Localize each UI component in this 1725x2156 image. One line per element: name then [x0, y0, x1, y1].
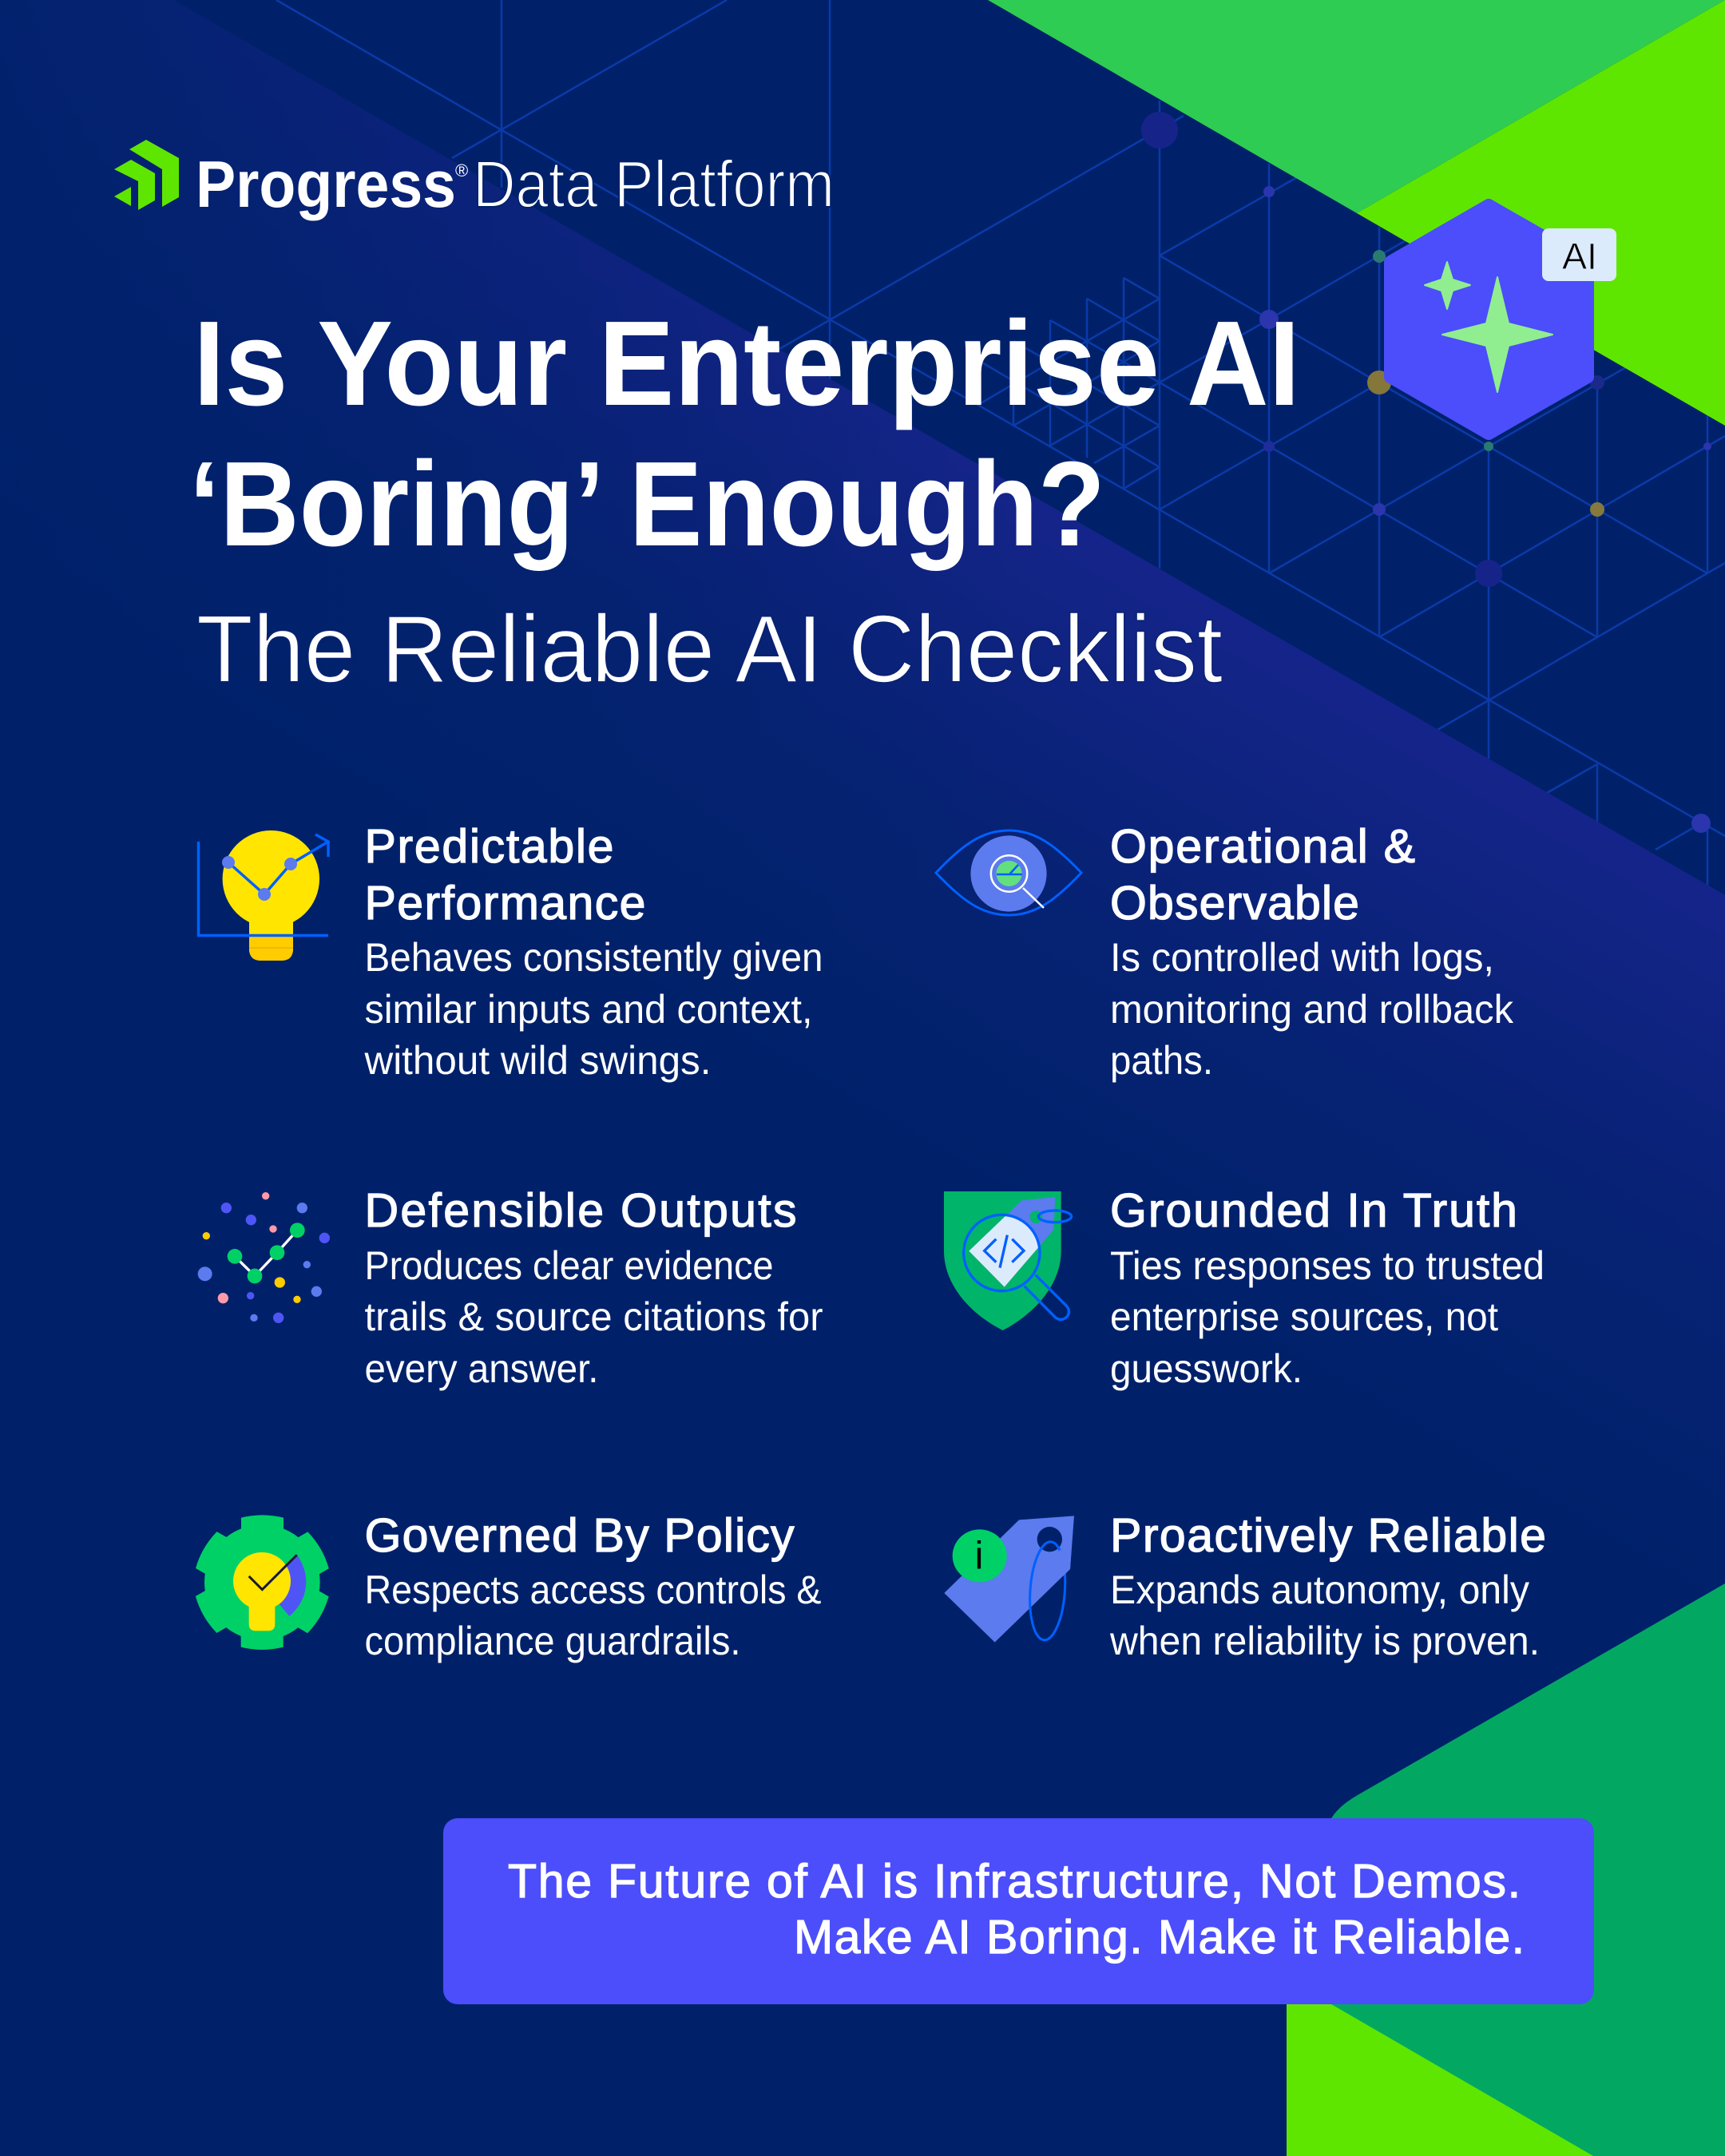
logo: Progress Data Platform: ®	[455, 161, 468, 180]
description: every answer.	[364, 1346, 599, 1391]
icon: lightbulb chart	[198, 830, 328, 961]
description: compliance guardrails.	[364, 1619, 741, 1663]
logo: Progress Data Platform	[114, 140, 835, 221]
panel: proactively reliable	[944, 1509, 1546, 1663]
heading: Performance	[364, 877, 645, 929]
description: Produces clear evidence	[364, 1243, 773, 1288]
description	[1110, 1243, 1545, 1391]
description: Behaves consistently given	[364, 935, 823, 980]
icon: info tag: i	[975, 1535, 983, 1578]
title: ‘Boring’ Enough?	[189, 436, 1105, 571]
description: Expands autonomy, only	[1110, 1567, 1529, 1612]
heading	[1110, 820, 1415, 929]
panel: grounded in truth	[944, 1184, 1545, 1391]
heading: Defensible Outputs	[364, 1184, 797, 1237]
description	[364, 935, 823, 1083]
bottom right green shape	[1327, 1583, 1725, 2156]
icon: gear with lightbulb check	[193, 1515, 331, 1650]
description: monitoring and rollback	[1110, 987, 1514, 1032]
icon: Progress mark	[114, 140, 179, 210]
network node dots	[1141, 112, 1711, 833]
heading: Operational &	[1110, 820, 1415, 873]
description: guesswork.	[1110, 1346, 1303, 1391]
top right lime triangle	[1357, 0, 1725, 426]
logo: Progress Data Platform: Progress	[196, 147, 456, 221]
description: paths.	[1110, 1038, 1213, 1083]
title: Is Your Enterprise AI	[193, 295, 1300, 430]
heading: Observable	[1110, 877, 1359, 929]
icon: info tag	[944, 1516, 1074, 1643]
description: Ties responses to trusted	[1110, 1243, 1545, 1288]
title	[189, 295, 1300, 571]
description: similar inputs and context,	[364, 987, 813, 1032]
logo: Progress Data Platform: Data Platform	[473, 147, 835, 221]
heading: Proactively Reliable	[1110, 1509, 1546, 1562]
description	[364, 1567, 821, 1663]
description	[1110, 935, 1514, 1083]
heading	[364, 820, 645, 929]
icon: shield with code tag	[944, 1191, 1072, 1330]
description: without wild swings.	[364, 1038, 711, 1083]
icon: AI sparkle hexagon: AI	[1562, 236, 1597, 277]
subtitle: The Reliable AI Checklist	[196, 596, 1223, 703]
description: trails & source citations for	[364, 1294, 823, 1339]
callout: Make AI Boring. Make it Reliable.	[794, 1911, 1525, 1964]
heading: Governed By Policy	[364, 1509, 795, 1562]
top right green triangle	[988, 0, 1725, 213]
callout: The Future of AI is Infrastructure, Not Demos.	[508, 1855, 1521, 1908]
description	[364, 1243, 823, 1391]
description: Respects access controls &	[364, 1567, 821, 1612]
icon: AI sparkle hexagon	[1390, 205, 1616, 434]
panel: defensible outputs	[198, 1184, 823, 1391]
description: enterprise sources, not	[1110, 1294, 1498, 1339]
callout	[443, 1818, 1594, 2004]
description: Is controlled with logs,	[1110, 935, 1494, 980]
bottom right lime shape	[1287, 1916, 1597, 2156]
icon: eye with magnifier	[936, 830, 1081, 915]
heading: Grounded In Truth	[1110, 1184, 1517, 1237]
panel: governed by policy	[193, 1509, 821, 1663]
heading: Predictable	[364, 820, 613, 873]
description	[1109, 1567, 1540, 1663]
panel: operational and observable	[936, 820, 1514, 1083]
panel: predictable performance	[198, 820, 823, 1083]
description: when reliability is proven.	[1109, 1619, 1540, 1663]
icon: connected dots	[198, 1192, 330, 1323]
